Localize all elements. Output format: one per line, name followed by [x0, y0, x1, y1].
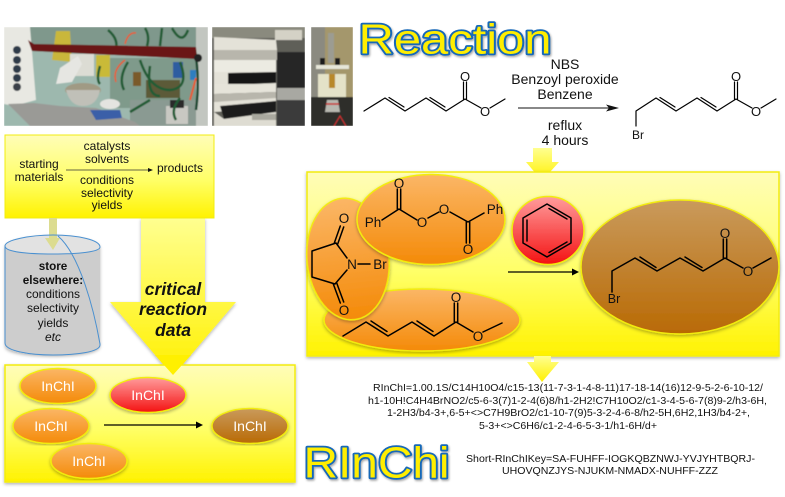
- text: Short-RInChIKey: Short-RInChIKey=SA-FUHFF-IOGKQBZNWJ-YVJYHTBQRJ-: [466, 453, 755, 465]
- oval: InChI 4: [51, 444, 127, 478]
- scheme: brominated product skeletal structure: [632, 69, 776, 142]
- cylinder: store elsewhere: store: [39, 260, 68, 273]
- oval: InChI 4: InChI: [72, 453, 106, 469]
- oval: benzoyl peroxide: Ph: [365, 215, 381, 230]
- scheme: starting material skeletal structure: [364, 69, 505, 119]
- scheme: brominated product skeletal structure: O: [751, 104, 761, 119]
- arrow: critical reaction data: reaction: [139, 299, 207, 319]
- arrow: critical reaction data: [110, 218, 236, 376]
- oval: InChI 1: [20, 368, 96, 404]
- panel: generic reaction scheme: products: [157, 161, 203, 175]
- oval: benzoyl peroxide: O: [439, 202, 449, 217]
- circle: benzene: [512, 196, 584, 264]
- photo: reactor apparatus: [311, 27, 353, 126]
- oval: InChI red: InChI: [131, 387, 165, 403]
- oval: brominated product: O: [743, 264, 753, 279]
- cylinder: store elsewhere: etc: [45, 330, 61, 344]
- scheme: reaction arrow with conditions: reflux: [548, 117, 582, 133]
- photo: flow chemistry fume hood: [4, 27, 208, 126]
- oval: InChI 3: InChI: [34, 418, 68, 434]
- heading: Reaction: Reaction: [358, 16, 552, 62]
- arrow: InChI to product: [104, 422, 203, 428]
- scheme: reaction arrow with conditions: 4 hours: [542, 132, 588, 148]
- text: RInChI string: 1-2H3/b4-3+,6-5+<>C7H9BrO2/c1-10-7(9)5-3-2-4-6-8/h2-5H,6H2,1H3/b4-2+,: [387, 407, 750, 419]
- oval: brominated product: O: [720, 226, 730, 241]
- text: Short-RInChIKey: [466, 453, 755, 477]
- panel: InChI ovals: [5, 355, 295, 482]
- text: RInChI string: h1-10H!C4H4BrNO2/c5-6-3(7)1-2-4(6)8/h1-2H2!C7H10O2/c1-3-4-5-6-7(8)9-2/h3-6H,: [368, 395, 767, 407]
- oval: NBS: N: [347, 257, 357, 272]
- arrow: to storage: [45, 218, 60, 250]
- heading: RInChi: RInChi: [304, 440, 450, 488]
- oval: benzoyl peroxide: O: [463, 242, 473, 257]
- oval: benzoyl peroxide: [357, 174, 505, 264]
- oval: InChI 1: InChI: [41, 378, 75, 394]
- oval: methyl sorbate: O: [473, 329, 483, 344]
- cylinder: store elsewhere: selectivity: [27, 301, 79, 315]
- text: RInChI string: [368, 382, 767, 432]
- arrow: reaction to structures panel: [526, 148, 559, 181]
- panel: generic reaction scheme: selectivity: [81, 186, 133, 200]
- panel: reaction components: [301, 172, 779, 356]
- arrow: critical reaction data: critical: [145, 279, 202, 299]
- oval: benzoyl peroxide: Ph: [487, 202, 503, 217]
- scheme: starting material skeletal structure: O: [460, 69, 470, 84]
- arrow: critical reaction data: data: [155, 320, 191, 340]
- oval: NBS: Br: [373, 257, 387, 272]
- photo: stacked HPLC instruments: [212, 27, 305, 126]
- oval: brominated product: Br: [608, 292, 620, 306]
- scheme: brominated product skeletal structure: O: [731, 69, 741, 84]
- cylinder: store elsewhere: yields: [38, 316, 68, 330]
- text: RInChI string: 5-3+<>C6H6/c1-2-4-6-5-3-1/h1-6H/d+: [479, 420, 657, 432]
- cylinder: store elsewhere: conditions: [26, 287, 80, 301]
- oval: InChI brown: InChI: [233, 418, 267, 434]
- oval: benzoyl peroxide: O: [417, 215, 427, 230]
- text: Short-RInChIKey: UHOVQNZJYS-NJUKM-NMADX-NUHFF-ZZZ: [502, 465, 719, 477]
- arrow: panel to RInChI string: [527, 356, 559, 382]
- oval: InChI red: [110, 378, 186, 412]
- oval: InChI brown: [212, 408, 288, 444]
- oval: methyl sorbate: O: [451, 290, 461, 305]
- panel: generic reaction scheme: solvents: [85, 152, 129, 166]
- panel: generic reaction scheme: catalysts: [84, 139, 130, 153]
- text: RInChI string: RInChI=1.00.1S/C14H10O4/c15-13(11-7-3-1-4-8-11)17-18-14(16)12-9-5-2-6-10-12/: [373, 382, 763, 394]
- arrow tip overlap: [155, 355, 191, 375]
- scheme: reaction arrow with conditions: NBS: [551, 56, 579, 72]
- panel: generic reaction scheme: materials: [15, 170, 63, 184]
- panel: generic reaction scheme: starting: [19, 157, 59, 171]
- cylinder: store elsewhere: [5, 218, 100, 355]
- oval: NBS: O: [339, 211, 349, 226]
- oval: InChI 3: [13, 408, 89, 444]
- oval: methyl sorbate: [324, 289, 520, 351]
- scheme: reaction arrow with conditions: Benzoyl peroxide: [511, 71, 619, 87]
- scheme: starting material skeletal structure: O: [480, 104, 490, 119]
- panel: generic reaction scheme: yields: [92, 198, 122, 212]
- oval: NBS: [301, 194, 395, 324]
- oval: brominated product: [581, 200, 779, 334]
- oval: NBS: O: [339, 303, 349, 318]
- scheme: reaction arrow with conditions: [511, 56, 619, 148]
- oval: benzoyl peroxide: O: [394, 176, 404, 191]
- scheme: brominated product skeletal structure: Br: [632, 128, 644, 142]
- panel: generic reaction scheme: [5, 135, 214, 218]
- arrow: reagents to product: [508, 268, 579, 276]
- cylinder: store elsewhere: elsewhere:: [23, 274, 83, 287]
- panel: generic reaction scheme: conditions: [80, 173, 134, 187]
- scheme: reaction arrow with conditions: Benzene: [537, 86, 593, 102]
